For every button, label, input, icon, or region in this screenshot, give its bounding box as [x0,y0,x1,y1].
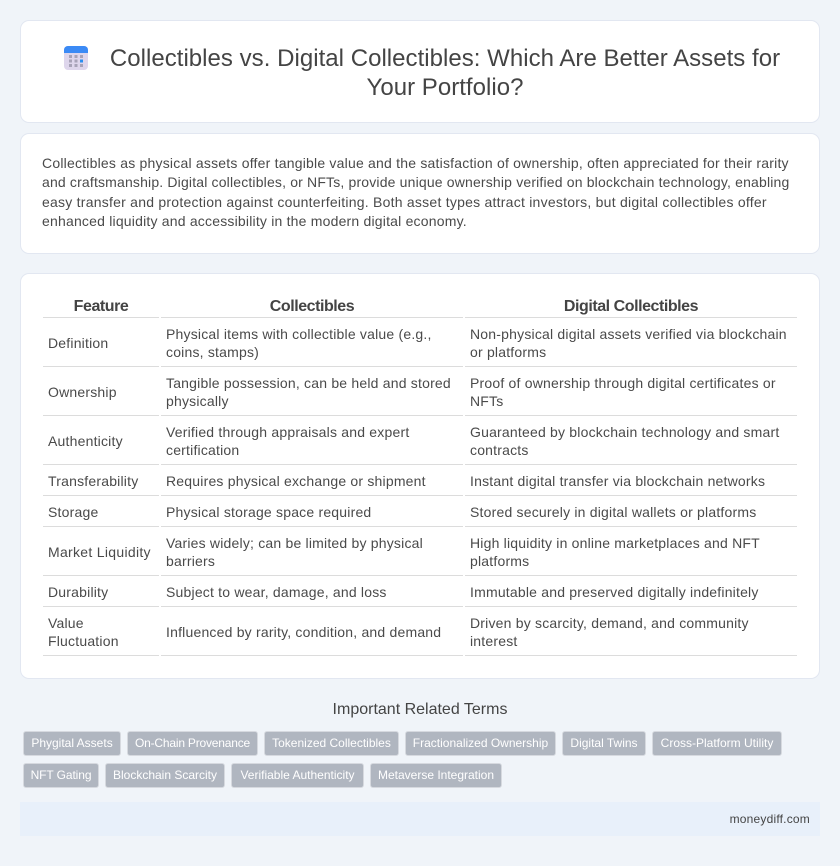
row: durability [43,584,797,607]
tags: related terms: Digital Twins [570,736,638,750]
row: authenticity: Guaranteed by blockchain technology and smart [470,424,779,440]
row: market liquidity: High liquidity in online marketplaces and NFT [470,534,760,550]
row: durability: Subject to wear, damage, and loss [166,584,387,600]
row: storage [43,504,797,527]
row: value fluctuation: Driven by scarcity, demand, and community [470,614,749,630]
row: value fluctuation [43,614,797,656]
tags: related terms: On-Chain Provenance [135,736,250,750]
row: durability: Durability [48,584,108,600]
row: ownership: Ownership [48,384,117,400]
tags: related terms: Blockchain Scarcity [113,768,217,782]
footer source: moneydiff.com [730,812,810,826]
row: definition: coins, stamps) [166,344,259,360]
row: ownership: NFTs [470,392,503,408]
title [110,45,780,101]
title: Collectibles vs. Digital Collectibles: Which Are Better Assets for [110,45,780,72]
row: authenticity: Verified through appraisals and expert [166,424,409,440]
row: value fluctuation: Fluctuation [48,632,119,648]
panel: comparison table [20,273,820,679]
tags: related terms: Phygital Assets [31,736,113,750]
table header: Digital Collectibles [564,298,698,315]
tags: related terms: NFT Gating [31,768,91,782]
row: authenticity: contracts [470,442,529,458]
tags: related terms: Tokenized Collectibles [272,736,391,750]
row: ownership: physically [166,392,229,408]
footer [20,802,820,836]
tags: related terms: Verifiable Authenticity [240,768,355,782]
row: transferability: Instant digital transfer via blockchain networks [470,472,765,488]
row: ownership: Proof of ownership through digital certificates or [470,374,776,390]
row: storage: Stored securely in digital wallets or platforms [470,504,756,520]
table header: Feature [74,298,128,315]
panel: header [20,20,820,123]
panel: introduction [20,133,820,254]
row: definition: Non-physical digital assets verified via blockchain [470,326,787,342]
row: value fluctuation: Value [48,614,84,630]
intro text [42,155,789,229]
row: ownership: Tangible possession, can be held and stored [166,374,451,390]
row: market liquidity [43,534,797,576]
row: definition: Definition [48,334,108,350]
row: definition: or platforms [470,344,546,360]
row: transferability: Requires physical exchange or shipment [166,472,426,488]
row: definition [43,326,797,367]
intro text: easy transfer and protection against counterfeiting. Both asset types attract investors, but digital collectibles offer [42,194,767,210]
row: authenticity: certification [166,442,239,458]
row: market liquidity: Varies widely; can be limited by physical [166,534,423,550]
row: transferability: Transferability [48,472,138,488]
tags: related terms: Cross-Platform Utility [661,736,773,750]
table header [43,298,797,318]
row: market liquidity: Market Liquidity [48,544,151,560]
table header: Collectibles [270,298,354,315]
title: Your Portfolio? [366,74,524,101]
intro text: and craftsmanship. Digital collectibles, or NFTs, provide unique ownership verified on blockchain technology, enabling [42,174,789,190]
row: value fluctuation: interest [470,632,518,648]
row: market liquidity: platforms [470,552,529,568]
row: durability: Immutable and preserved digitally indefinitely [470,584,759,600]
heading: important related terms: Important Related Terms [333,701,507,718]
row: storage: Storage [48,504,98,520]
row: ownership [43,374,797,416]
row: definition: Physical items with collectible value (e.g., [166,326,432,342]
row: transferability [43,472,797,496]
row: value fluctuation: Influenced by rarity, condition, and demand [166,624,441,640]
intro text: Collectibles as physical assets offer tangible value and the satisfaction of ownership, often appreciated for their rarity [42,155,789,171]
row: authenticity [43,424,797,465]
intro text: enhanced liquidity and accessibility in the modern digital economy. [42,213,467,229]
row: authenticity: Authenticity [48,432,123,448]
tags: related terms: Fractionalized Ownership [413,736,548,750]
row: market liquidity: barriers [166,552,215,568]
tags: related terms [23,731,782,788]
row: storage: Physical storage space required [166,504,371,520]
icon: calendar [64,46,88,70]
tags: related terms: Metaverse Integration [378,768,494,782]
